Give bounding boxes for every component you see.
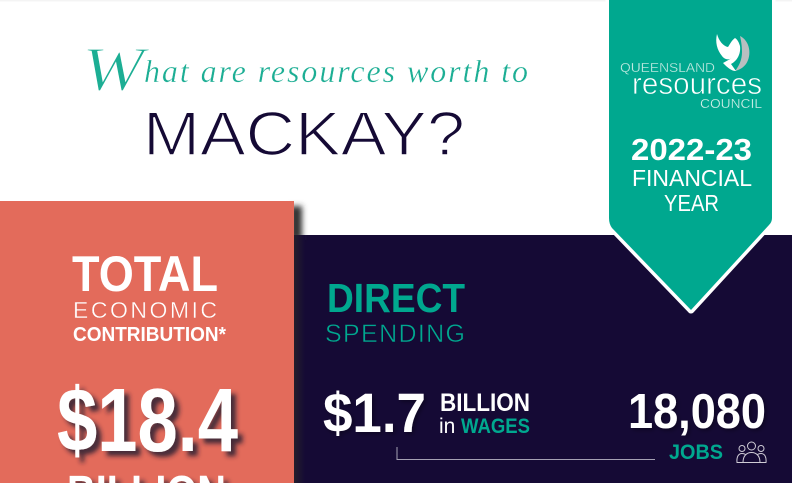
text: council: COUNCIL xyxy=(700,97,762,111)
stat: jobs value: 18,080 xyxy=(628,385,766,439)
heading: contribution: CONTRIBUTION* xyxy=(73,324,226,346)
stat: wages label: WAGES xyxy=(461,415,530,438)
stat: jobs label: JOBS xyxy=(669,441,723,464)
text: year: YEAR xyxy=(664,190,719,216)
ribbon: financial year xyxy=(609,0,772,310)
stat: wages unit: BILLION xyxy=(440,389,530,417)
stat: wages label: in xyxy=(439,415,455,438)
icon: logo bird xyxy=(716,34,749,71)
stat: wages value: $1.7 xyxy=(323,381,426,444)
heading: total: TOTAL xyxy=(72,246,218,302)
text: resources: resources xyxy=(632,66,762,101)
stat: total value: $18.4 xyxy=(57,371,238,471)
panel: total economic contribution xyxy=(0,201,305,483)
heading: direct: DIRECT xyxy=(327,275,465,321)
icon: people xyxy=(737,442,766,462)
connector line xyxy=(397,447,655,460)
text: financial: FINANCIAL xyxy=(632,165,752,191)
logo: Queensland Resources Council xyxy=(620,34,762,111)
heading: script question: W xyxy=(82,36,150,104)
heading: economic: ECONOMIC xyxy=(73,297,217,323)
text: Queensland: QUEENSLAND xyxy=(620,60,715,75)
heading: spending: SPENDING xyxy=(325,320,465,348)
panel: direct spending xyxy=(294,235,792,483)
heading: script question: hat are resources worth to xyxy=(144,53,528,89)
heading: Mackay: MACKAY? xyxy=(143,100,465,169)
text: 2022-23: 2022-23 xyxy=(631,132,752,167)
